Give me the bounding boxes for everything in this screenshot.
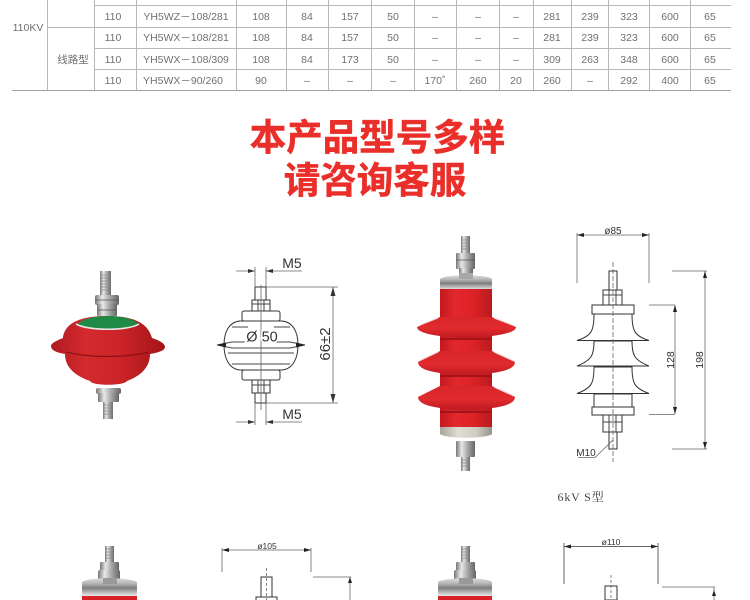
table row: YH5WZ-108/281: 239	[581, 11, 599, 23]
table row: YH5WX-108/281: –	[475, 32, 481, 44]
table row: YH5WX-108/281: 323	[620, 32, 638, 44]
table row: YH5WX-108/309: 348	[620, 54, 638, 66]
table row: YH5WX-108/309: –	[432, 54, 438, 66]
table row: YH5WX-90/260: 65	[704, 75, 716, 87]
dimension: M10 thread	[576, 440, 613, 459]
table row: YH5WX-108/281: 157	[341, 32, 359, 44]
table row: YH5WX-90/260: –	[587, 75, 593, 87]
table row: YH5WZ-108/281: –	[513, 11, 519, 23]
table row: YH5WZ-108/281	[105, 11, 716, 23]
table row: YH5WX-90/260: 20	[510, 75, 522, 87]
dimension: bottom M5: M5	[282, 406, 302, 422]
table row: YH5WZ-108/281: 157	[341, 11, 359, 23]
table row: YH5WX-90/260: 292	[620, 75, 638, 87]
table row: YH5WX-108/309: 110	[105, 54, 122, 66]
table row: YH5WX-108/281	[105, 32, 716, 44]
table row: YH5WX-90/260: –	[304, 75, 310, 87]
dimension: height 198	[672, 271, 707, 449]
table row: YH5WX-90/260	[105, 75, 716, 87]
shed 2	[418, 351, 515, 376]
dimension: height 128	[649, 305, 677, 414]
table row: YH5WX-90/260: 110	[105, 75, 122, 87]
table row: YH5WX-108/281: 108	[252, 32, 270, 44]
dimension: height 128: 128	[665, 351, 677, 369]
table row: YH5WZ-108/281: 84	[301, 11, 313, 23]
spec table	[0, 0, 750, 100]
photo: red arrester with three sheds	[417, 236, 516, 471]
heading: 请咨询客服	[284, 160, 466, 201]
table row: YH5WZ-108/281: 50	[387, 11, 399, 23]
table row: YH5WZ-108/281: 108	[252, 11, 270, 23]
table row: YH5WX-90/260: 260	[543, 75, 561, 87]
table row: YH5WX-108/309: 309	[543, 54, 561, 66]
table row labels: 线路型	[57, 53, 89, 66]
dimension: height 198: 198	[694, 351, 706, 369]
table row: YH5WX-108/281: 281	[543, 32, 561, 44]
photo: lower left arrester	[82, 546, 137, 600]
technical drawing: lower right, diameter 110	[564, 537, 716, 600]
table row: YH5WX-90/260: –	[347, 75, 353, 87]
table row: YH5WX-108/309: –	[475, 54, 481, 66]
table row: YH5WZ-108/281: –	[432, 11, 438, 23]
technical drawing: lower left, diameter 105	[222, 541, 352, 600]
table row labels	[13, 22, 89, 66]
table row: YH5WZ-108/281: 110	[105, 11, 122, 23]
table row: YH5WX-108/281: 65	[704, 32, 716, 44]
table row: YH5WX-108/281: –	[432, 32, 438, 44]
technical drawing: small arrester	[217, 255, 338, 425]
dimension: height 66±2	[266, 287, 338, 403]
table row: YH5WX-108/309: YH5WX－108/309	[143, 54, 229, 66]
table row: YH5WX-108/309	[105, 54, 716, 66]
table row: YH5WX-108/281: YH5WX－108/281	[143, 32, 229, 44]
dimension: bottom M5	[236, 403, 302, 425]
table row: YH5WZ-108/281: 281	[543, 11, 561, 23]
technical drawing: lower right, diameter 110: ø110	[602, 537, 621, 547]
table row: YH5WX-108/309: 173	[341, 54, 359, 66]
table row: YH5WX-108/309: 50	[387, 54, 399, 66]
table row: YH5WZ-108/281: 65	[704, 11, 716, 23]
table row: YH5WX-108/309: –	[513, 54, 519, 66]
table row: YH5WX-108/309: 108	[252, 54, 270, 66]
dimension: top M5	[236, 255, 302, 287]
table row: YH5WX-108/281: 110	[105, 32, 122, 44]
table row: YH5WX-90/260: YH5WX－90/260	[143, 75, 223, 87]
table row: YH5WZ-108/281: –	[475, 11, 481, 23]
table row: YH5WZ-108/281: 600	[661, 11, 679, 23]
table row: YH5WX-108/309: 600	[661, 54, 679, 66]
table row labels: 110KV	[13, 22, 43, 34]
dimension: M10 thread: M10	[576, 448, 596, 459]
dimension: diameter 85	[577, 226, 649, 283]
table row: YH5WX-90/260: 90	[255, 75, 267, 87]
table row: YH5WX-90/260: 170˚	[424, 75, 446, 87]
shed 1	[417, 317, 516, 338]
technical drawing: lower left, diameter 105: ø105	[257, 541, 277, 551]
table row: YH5WZ-108/281: 323	[620, 11, 638, 23]
table grid	[12, 0, 731, 90]
caption: 6kV S型: 6kV S型	[558, 489, 604, 504]
table row: YH5WX-90/260: 260	[469, 75, 487, 87]
heading: 本产品型号多样	[250, 117, 505, 158]
technical drawing: arrester with three sheds	[576, 226, 707, 462]
shed 3	[418, 386, 515, 410]
photo: small red arrester	[51, 271, 165, 419]
table row: YH5WX-90/260: –	[390, 75, 396, 87]
dimension: diameter 85: ø85	[604, 226, 622, 237]
table row: YH5WX-90/260: 400	[661, 75, 679, 87]
table row: YH5WX-108/309: 263	[581, 54, 599, 66]
dimension: top M5: M5	[282, 255, 302, 271]
table row: YH5WX-108/281: 600	[661, 32, 679, 44]
table row: YH5WX-108/281: –	[513, 32, 519, 44]
heading	[250, 117, 505, 201]
table row: YH5WX-108/281: 84	[301, 32, 313, 44]
table row: YH5WX-108/281: 50	[387, 32, 399, 44]
table row: YH5WX-108/281: 239	[581, 32, 599, 44]
dimension: diameter 50: Ø 50	[246, 330, 278, 346]
table row: YH5WZ-108/281: YH5WZ－108/281	[143, 11, 229, 23]
photo: lower right arrester	[438, 546, 492, 600]
table row: YH5WX-108/309: 65	[704, 54, 716, 66]
table row: YH5WX-108/309: 84	[301, 54, 313, 66]
dimension: height 66±2: 66±2	[317, 327, 334, 361]
